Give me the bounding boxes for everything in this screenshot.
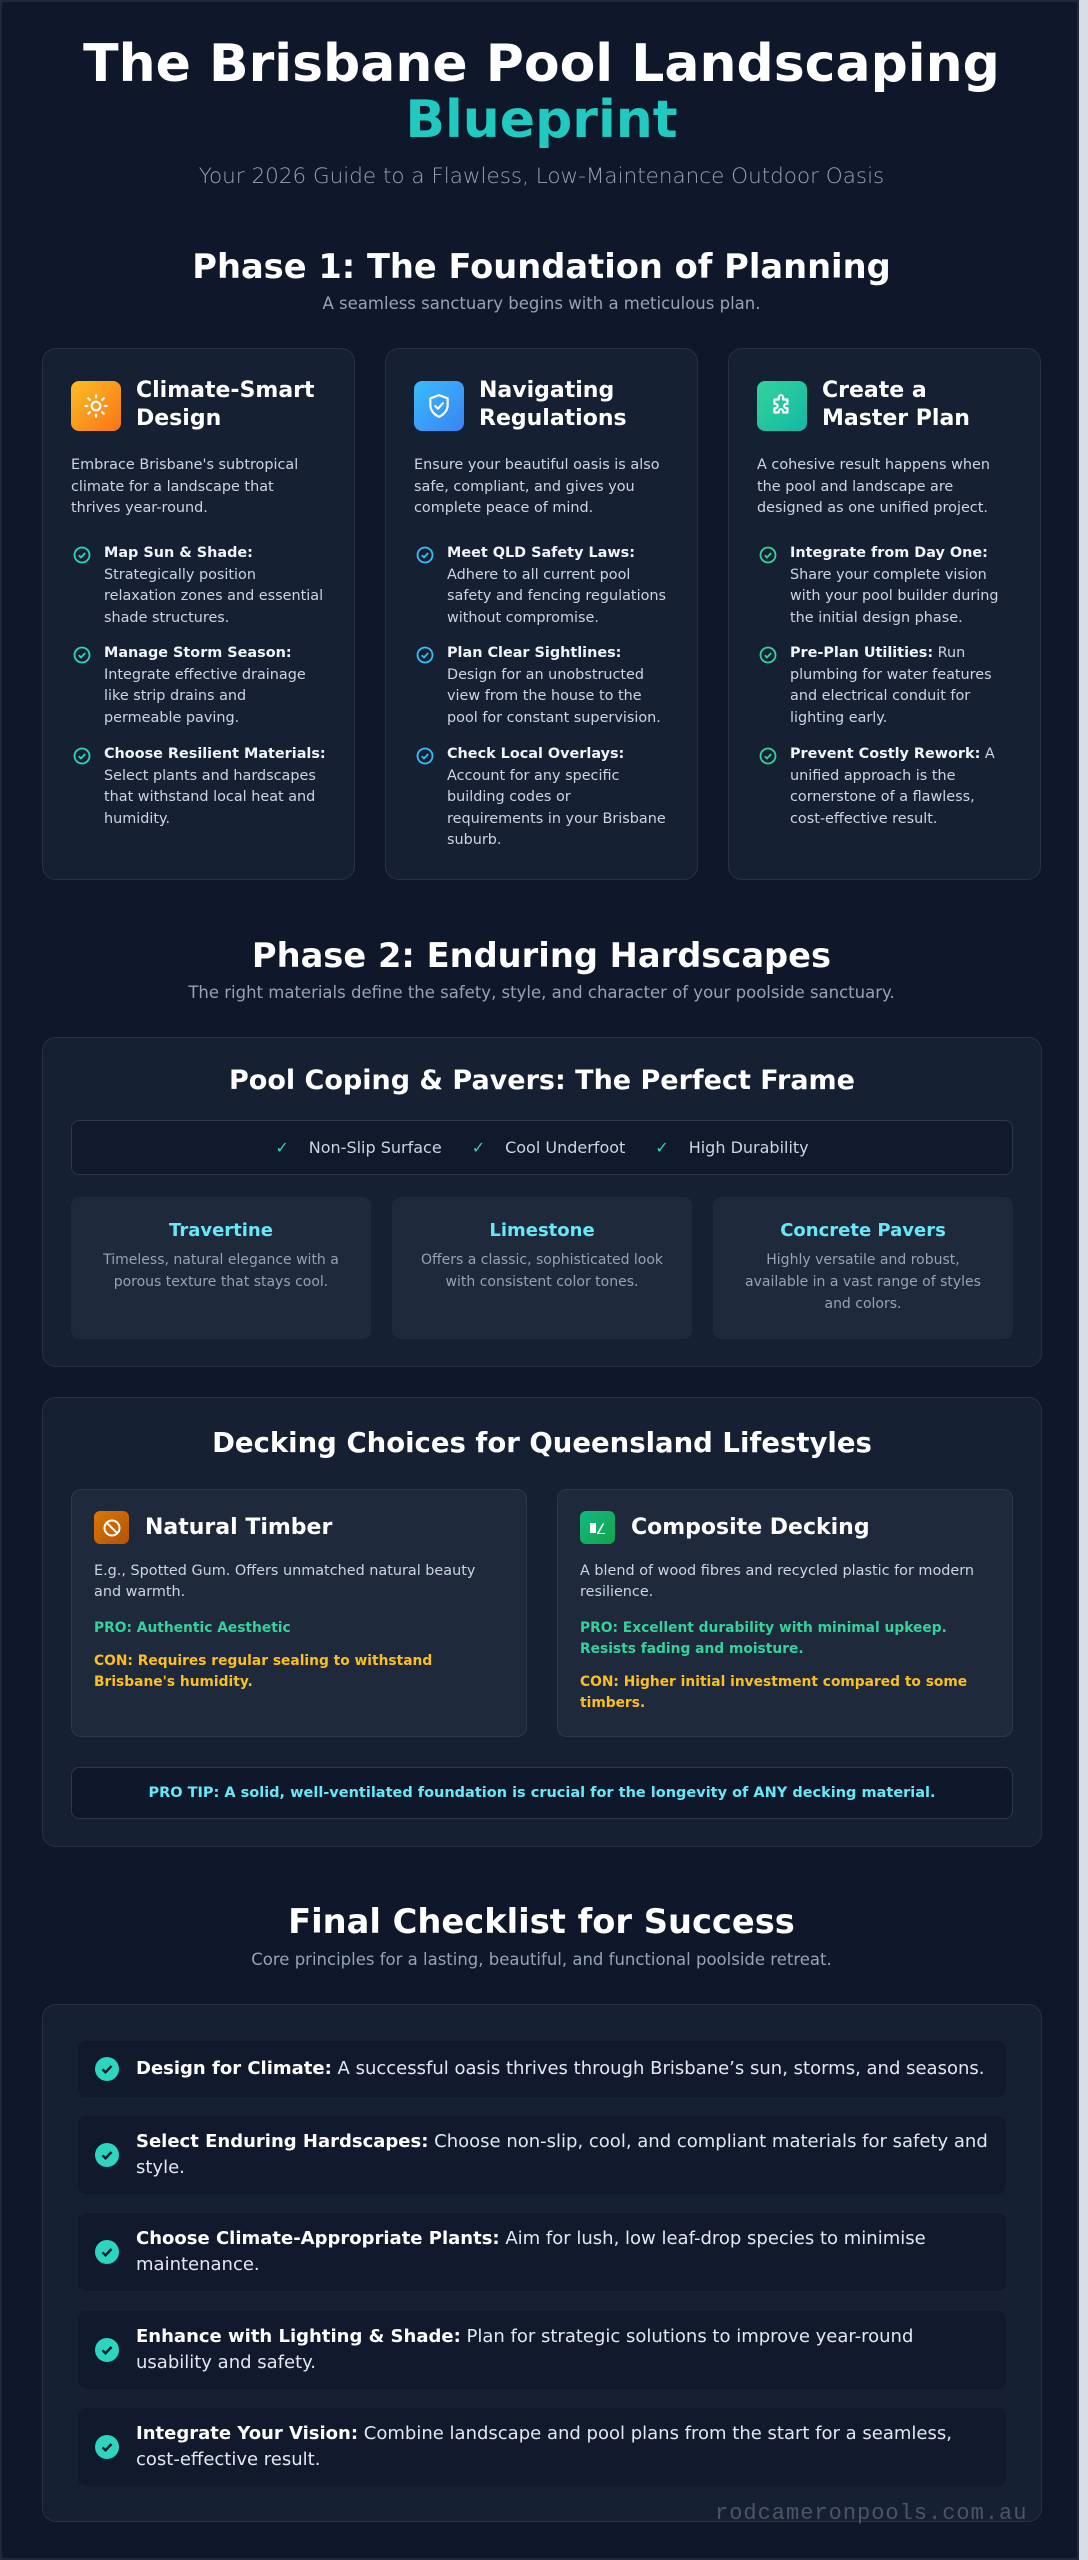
icon: puzzle: [757, 381, 807, 431]
bullet: day one: Integrate from Day One: Share your complete vision with your pool builder during the initial design phase.: [790, 545, 999, 626]
card: master plan: [728, 348, 1041, 880]
panel: checklist: [42, 2004, 1042, 2522]
feature bar: ✓ High Durability: [655, 1138, 809, 1157]
bullet: storm: Manage Storm Season: Integrate effective drainage like strip drains and permeable paving.: [104, 645, 306, 726]
icon: shield: [414, 381, 464, 431]
card title: Navigating: [479, 378, 614, 403]
deck text: [94, 1563, 475, 1690]
material: limestone: [392, 1197, 692, 1339]
card description: Ensure your beautiful oasis is also safe, compliant, and gives you complete peace of mind.: [414, 457, 660, 516]
card title: Climate-Smart: [136, 378, 315, 403]
bullet: sightlines: Plan Clear Sightlines:: [447, 645, 621, 661]
icon: sun: [71, 381, 121, 431]
material: concrete pavers: [713, 1197, 1013, 1339]
deck text: [580, 1563, 974, 1711]
bullet: map sun: Map Sun & Shade: Strategically position relaxation zones and essential shade structures.: [104, 545, 323, 626]
deck title: Natural Timber: [145, 1515, 332, 1540]
card description: A cohesive result happens when the pool and landscape are designed as one unified project.: [757, 457, 990, 516]
deck text: PRO: Excellent durability with minimal upkeep. Resists fading and moisture.: [580, 1620, 947, 1657]
phase 2 subheading: The right materials define the safety, style, and character of your poolside sanctuary.: [188, 983, 895, 1002]
item 4: Enhance with Lighting & Shade: Plan for strategic solutions to improve year-round: [136, 2326, 913, 2347]
panel: decking: [42, 1397, 1042, 1847]
subtitle: Your 2026 Guide to a Flawless, Low-Maintenance Outdoor Oasis: [199, 164, 884, 189]
item 5: Integrate Your Vision: Combine landscape and pool plans from the start for a seamless, cost-effective result.: [136, 2423, 952, 2470]
icon: composite: [580, 1511, 615, 1544]
card title: Regulations: [479, 406, 627, 431]
title: The Brisbane Pool Landscaping: [83, 34, 1000, 94]
deck text: E.g., Spotted Gum. Offers unmatched natural beauty and warmth.: [94, 1563, 475, 1600]
panel: pool coping: [42, 1037, 1042, 1367]
material: travertine: [71, 1197, 371, 1339]
bullet: utilities: Pre-Plan Utilities: Run plumbing for water features and electrical conduit for lighting early.: [790, 645, 992, 726]
phase 1 heading: Phase 1: The Foundation of Planning: [192, 247, 891, 286]
item 3: [78, 2213, 1006, 2291]
panel title: Decking Choices for Queensland Lifestyles: [212, 1427, 872, 1459]
card: navigating regulations: [385, 348, 698, 880]
bullet: safety laws: Meet QLD Safety Laws: Adhere to all current pool safety and fencing regulations without compromise.: [447, 545, 666, 626]
material: concrete pavers: Concrete Pavers: [780, 1220, 946, 1241]
bullet: rework: Prevent Costly Rework: A unified approach is the cornerstone of a flawless, cost-effective result.: [790, 746, 995, 827]
item 2: Select Enduring Hardscapes: Choose non-slip, cool, and compliant materials for safety and style.: [136, 2131, 988, 2178]
deck text: CON: Requires regular sealing to withstand Brisbane's humidity.: [94, 1653, 432, 1690]
title: [83, 34, 1000, 150]
bullet: sightlines: Design for an unobstructed view from the house to the pool for constant supervision.: [447, 667, 661, 726]
deck text: CON: Higher initial investment compared to some timbers.: [580, 1674, 967, 1711]
feature bar: ✓ Cool Underfoot: [472, 1138, 625, 1157]
pro tip callout: PRO TIP: A solid, well-ventilated foundation is crucial for the longevity of ANY decking material.: [148, 1785, 936, 1801]
card: climate-smart design: [42, 348, 355, 880]
item 2: [78, 2116, 1006, 2194]
feature bar: ✓ Non-Slip Surface: [275, 1138, 442, 1157]
panel title: Pool Coping & Pavers: The Perfect Frame: [229, 1065, 855, 1096]
material: travertine: Travertine: [169, 1220, 273, 1241]
bullet: materials: Choose Resilient Materials: Select plants and hardscapes that withstand local heat and humidity.: [104, 746, 326, 827]
item 1: [78, 2041, 1006, 2097]
item 4: usability and safety.: [136, 2352, 316, 2373]
card description: Embrace Brisbane's subtropical climate for a landscape that thrives year-round.: [71, 457, 298, 516]
material: limestone: Limestone: [489, 1220, 595, 1241]
item 1: Design for Climate: A successful oasis thrives through Brisbane’s sun, storms, and seasons.: [136, 2058, 984, 2079]
final heading: Final Checklist for Success: [288, 1902, 795, 1941]
card title: [136, 378, 315, 431]
material: limestone: Offers a classic, sophisticated look with consistent color tones.: [421, 1252, 663, 1290]
deck card: natural timber: [71, 1489, 527, 1737]
feature bar: [71, 1120, 1013, 1175]
card title: Create a: [822, 378, 927, 403]
deck text: A blend of wood fibres and recycled plastic for modern resilience.: [580, 1563, 974, 1600]
icon: timber: [94, 1511, 129, 1544]
card title: [479, 378, 627, 431]
item 4: [78, 2311, 1006, 2389]
card title: [822, 378, 970, 431]
deck text: PRO: Authentic Aesthetic: [94, 1620, 291, 1636]
card title: Master Plan: [822, 406, 970, 431]
material: travertine: Timeless, natural elegance with a porous texture that stays cool.: [103, 1252, 339, 1290]
phase 1 subheading: A seamless sanctuary begins with a meticulous plan.: [323, 294, 760, 313]
card title: Design: [136, 406, 221, 431]
phase 2 heading: Phase 2: Enduring Hardscapes: [252, 936, 831, 975]
final subheading: Core principles for a lasting, beautiful, and functional poolside retreat.: [251, 1950, 832, 1969]
watermark: rodcameronpools.com.au: [715, 2501, 1027, 2526]
bullet: sightlines: [416, 645, 661, 726]
item 5: [78, 2408, 1006, 2486]
item 3: Choose Climate-Appropriate Plants: Aim for lush, low leaf-drop species to minimise maintenance.: [136, 2228, 926, 2275]
material: concrete pavers: Highly versatile and robust, available in a vast range of styles and colors.: [745, 1252, 981, 1312]
deck title: Composite Decking: [631, 1515, 870, 1540]
deck card: composite: [557, 1489, 1013, 1737]
title: Blueprint: [405, 90, 678, 150]
bullet: overlays: Check Local Overlays: Account for any specific building codes or requirements in your Brisbane suburb.: [447, 746, 666, 848]
pro tip callout: [71, 1767, 1013, 1819]
